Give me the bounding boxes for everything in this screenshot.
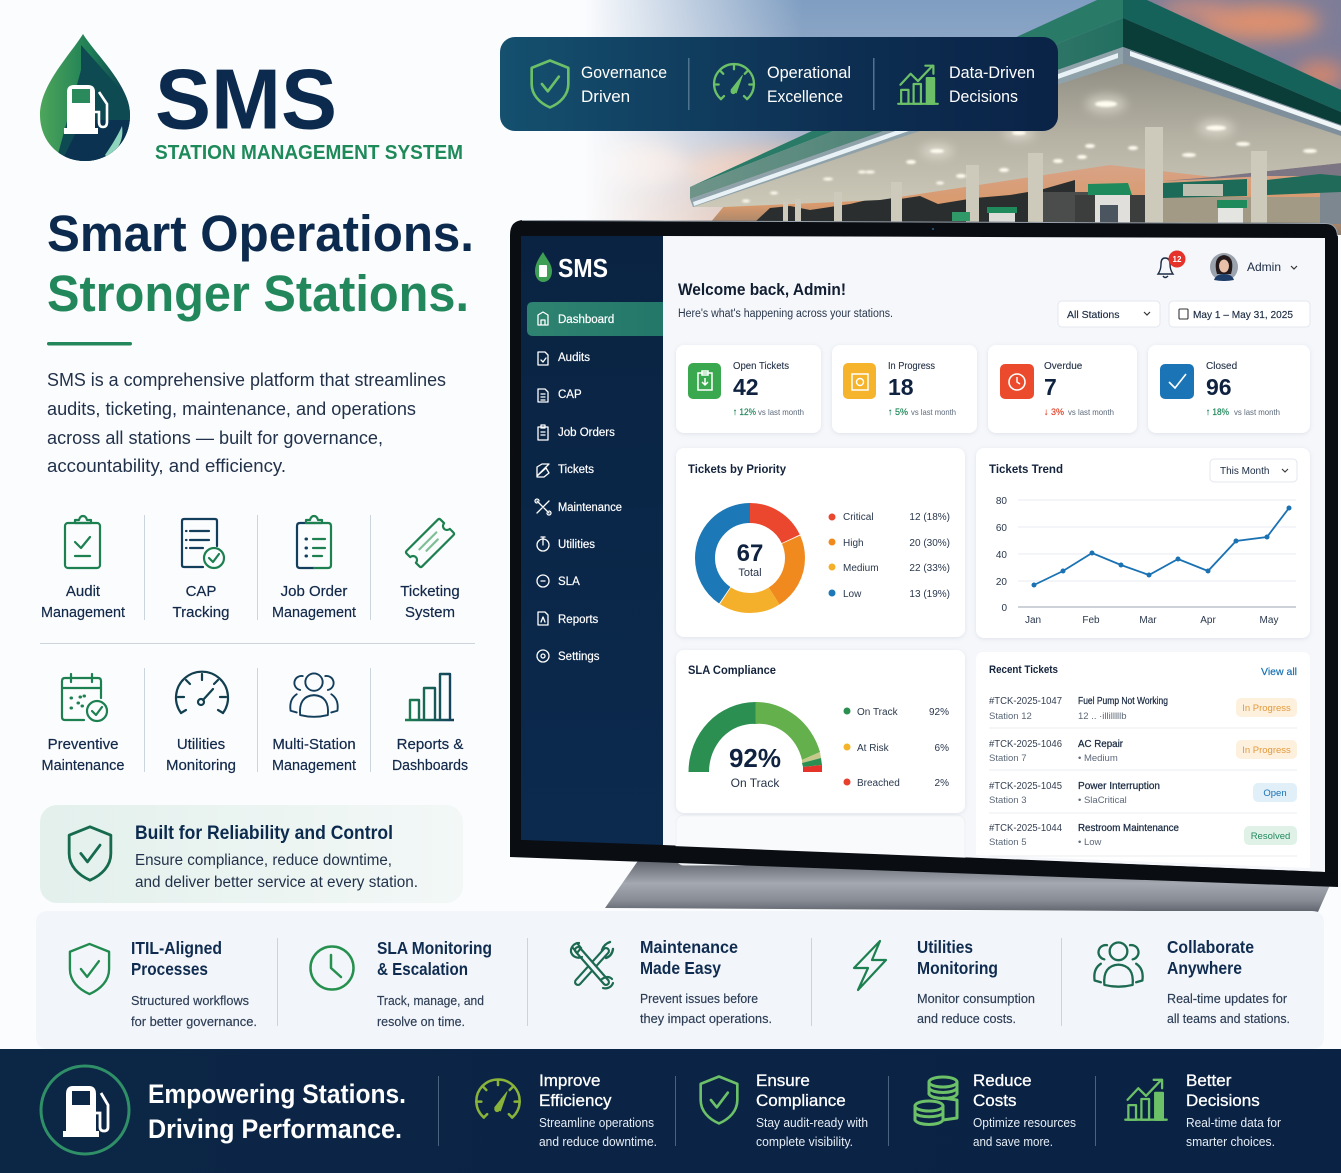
ticket row 1047: In Progress bbox=[1242, 703, 1291, 714]
user avatar: Admin bbox=[1247, 260, 1281, 274]
text: data-driven decisions: Decisions bbox=[949, 87, 1018, 106]
card: recent tickets: View all bbox=[1261, 666, 1297, 678]
label: audit management: Management bbox=[41, 604, 126, 621]
priority legend: 12 (18%) bbox=[909, 512, 950, 523]
KPI: overdue: 7 bbox=[1044, 374, 1057, 400]
dropdown: this month bbox=[1210, 459, 1297, 482]
SLA legend: 6% bbox=[935, 743, 949, 754]
KPI: in progress: In Progress bbox=[888, 361, 935, 372]
footer: reduce costs: Costs bbox=[973, 1091, 1016, 1110]
donut chart: 67 bbox=[737, 540, 763, 567]
KPI: closed bbox=[1148, 345, 1310, 433]
priority legend: Low bbox=[843, 589, 862, 600]
feature: utilities monitoring: Monitoring bbox=[917, 958, 998, 978]
feature: SLA monitoring: resolve on time. bbox=[377, 1014, 465, 1029]
footer: improve efficiency: Improve bbox=[539, 1071, 600, 1090]
icon: growth chart bbox=[898, 66, 938, 104]
monitor stand bbox=[605, 855, 1330, 912]
icon: job order clipboard bbox=[297, 516, 331, 568]
KPI: overdue: Overdue bbox=[1044, 361, 1083, 372]
KPI: in progress: 18 bbox=[888, 374, 914, 400]
feature: utilities monitoring: and reduce costs. bbox=[917, 1011, 1016, 1026]
footer: ensure compliance: Compliance bbox=[756, 1091, 846, 1110]
module grid bbox=[40, 515, 475, 774]
label: job order management: Management bbox=[272, 604, 357, 621]
icon: callout shield bbox=[69, 827, 111, 880]
user avatar bbox=[1210, 253, 1297, 281]
ticket row 1047: #TCK-2025-1047 bbox=[989, 696, 1062, 707]
empty lower card bbox=[676, 815, 965, 865]
text: governance driven bbox=[581, 63, 667, 106]
ticket row 1047: 12 .. ·illilllllb bbox=[1078, 711, 1127, 722]
left roof bbox=[690, 0, 1123, 187]
feature: collaborate anywhere bbox=[1094, 937, 1290, 1026]
SLA legend: On Track bbox=[857, 707, 899, 718]
label: CAP tracking: CAP bbox=[186, 583, 216, 600]
ticket row 1046: • Medium bbox=[1078, 753, 1118, 764]
intro paragraph: accountability, and efficiency. bbox=[47, 455, 286, 476]
monitor bottom bezel bbox=[510, 838, 1338, 887]
ticket row 1045: Station 3 bbox=[989, 795, 1026, 806]
feature: maintenance made easy: they impact operations. bbox=[640, 1011, 772, 1026]
priority legend: Medium bbox=[843, 563, 879, 574]
feature: utilities monitoring bbox=[854, 937, 1035, 1026]
card: SLA compliance bbox=[676, 650, 965, 813]
intro paragraph: across all stations — built for governance, bbox=[47, 427, 383, 448]
gauge chart: 92% bbox=[729, 743, 781, 773]
ticket row 1047 bbox=[989, 696, 1297, 722]
KPI: in progress bbox=[832, 345, 977, 433]
icon: audit clipboard bbox=[65, 516, 100, 568]
icon: governance shield bbox=[532, 61, 568, 107]
icon: utilities gauge bbox=[176, 672, 228, 713]
sidebar bbox=[521, 236, 663, 845]
feature: SLA monitoring bbox=[310, 938, 492, 1029]
nav items bbox=[535, 312, 622, 663]
footer: ensure compliance: complete visibility. bbox=[756, 1135, 853, 1149]
priority legend bbox=[828, 512, 950, 600]
line chart: Jan bbox=[1025, 615, 1041, 626]
dropdown: this month: This Month bbox=[1220, 466, 1269, 477]
SLA legend: Breached bbox=[857, 778, 900, 789]
sidebar logo: SMS bbox=[558, 253, 608, 283]
KPI: overdue: ↓ 3% bbox=[1044, 407, 1065, 418]
banner: pillars bbox=[500, 37, 1058, 131]
filter: date range: May 1 – May 31, 2025 bbox=[1193, 309, 1293, 321]
intro paragraph bbox=[47, 369, 446, 476]
line chart: 0 bbox=[1001, 603, 1007, 614]
footer slogan: Driving Performance. bbox=[148, 1114, 402, 1144]
ticket row 1044: Restroom Maintenance bbox=[1078, 823, 1179, 834]
footer: reduce costs: and save more. bbox=[973, 1135, 1053, 1149]
ticket row 1045: #TCK-2025-1045 bbox=[989, 781, 1062, 792]
footer pump icon bbox=[41, 1066, 129, 1154]
footer: improve efficiency: Efficiency bbox=[539, 1091, 612, 1110]
KPI: open tickets: 42 bbox=[733, 374, 759, 400]
label: preventive maintenance bbox=[42, 736, 124, 774]
ticket row 1046: Station 7 bbox=[989, 753, 1026, 764]
label: utilities monitoring bbox=[166, 736, 236, 774]
label: audit management bbox=[41, 583, 126, 621]
footer: ensure compliance: Ensure bbox=[756, 1071, 810, 1090]
label: reports and dashboards: Reports & bbox=[397, 736, 463, 753]
KPI: open tickets: ↑ 12% bbox=[733, 407, 756, 418]
label: multi-station management bbox=[272, 736, 357, 774]
ticket row 1046: In Progress bbox=[1242, 745, 1291, 756]
line chart: 80 bbox=[996, 496, 1007, 507]
SLA legend bbox=[844, 707, 949, 789]
card: tickets by priority: Tickets by Priority bbox=[688, 462, 786, 476]
gauge chart: On Track bbox=[731, 776, 780, 790]
label: ticketing system: System bbox=[405, 604, 455, 621]
label: preventive maintenance: Maintenance bbox=[42, 757, 124, 774]
priority legend: 20 (30%) bbox=[909, 538, 950, 549]
callout text bbox=[135, 852, 418, 891]
welcome subtext: Here's what's happening across your stations. bbox=[678, 308, 893, 320]
ticket row 1044: Resolved bbox=[1251, 831, 1290, 842]
ticket row 1046: #TCK-2025-1046 bbox=[989, 739, 1062, 750]
priority legend: Critical bbox=[843, 512, 874, 523]
feature: SLA monitoring: & Escalation bbox=[377, 959, 468, 979]
line chart: Mar bbox=[1139, 615, 1157, 626]
ticket row 1047: Fuel Pump Not Working bbox=[1078, 696, 1168, 707]
icon: ticket bbox=[405, 518, 455, 568]
footer: ensure compliance: Stay audit-ready with bbox=[756, 1116, 868, 1130]
laptop monitor with dashboard bbox=[510, 220, 1338, 887]
ticket row 1047: Station 12 bbox=[989, 711, 1032, 722]
label: job order management: Job Order bbox=[281, 583, 347, 600]
feature: SLA monitoring: SLA Monitoring bbox=[377, 938, 492, 958]
label: CAP tracking: Tracking bbox=[173, 604, 229, 621]
text: governance driven: Driven bbox=[581, 87, 630, 106]
priority legend: 22 (33%) bbox=[909, 563, 950, 574]
nav items: Utilities bbox=[558, 539, 595, 551]
icon: gauge bbox=[714, 64, 754, 99]
KPI: closed: ↑ 18% bbox=[1206, 407, 1229, 418]
feature: ITIL-aligned processes: Processes bbox=[131, 959, 208, 979]
KPI: in progress: ↑ 5% bbox=[888, 407, 909, 418]
features strip bbox=[36, 911, 1324, 1049]
ticket row 1044: #TCK-2025-1044 bbox=[989, 823, 1062, 834]
feature: maintenance made easy: Maintenance bbox=[640, 937, 738, 957]
nav items: Audits bbox=[558, 352, 590, 364]
callout: reliability and control bbox=[40, 805, 463, 903]
feature: collaborate anywhere: all teams and stations. bbox=[1167, 1011, 1290, 1026]
card: tickets trend: Tickets Trend bbox=[989, 462, 1063, 476]
label: utilities monitoring: Monitoring bbox=[166, 757, 236, 774]
footer: better decisions: Better bbox=[1186, 1071, 1232, 1090]
footer: better decisions: Real-time data for bbox=[1186, 1116, 1281, 1130]
sidebar logo bbox=[535, 252, 608, 283]
label: reports and dashboards: Dashboards bbox=[392, 757, 468, 774]
fuel pumps bbox=[952, 183, 1247, 223]
footer: reduce costs: Optimize resources bbox=[973, 1116, 1076, 1130]
KPI: in progress: vs last month bbox=[911, 407, 956, 417]
feature: utilities monitoring: Utilities bbox=[917, 937, 973, 957]
nav items: CAP bbox=[558, 389, 582, 401]
text: operational excellence: Excellence bbox=[767, 87, 843, 106]
line chart: Feb bbox=[1082, 615, 1100, 626]
feature: collaborate anywhere: Anywhere bbox=[1167, 958, 1242, 978]
ticket row 1045: Power Interruption bbox=[1078, 781, 1160, 792]
footer: reduce costs: Reduce bbox=[973, 1071, 1032, 1090]
feature: SLA monitoring: Track, manage, and bbox=[377, 993, 484, 1008]
KPI: open tickets: Open Tickets bbox=[733, 361, 789, 372]
feature: maintenance made easy: Prevent issues before bbox=[640, 991, 758, 1006]
text: operational excellence bbox=[767, 63, 851, 106]
logo subtitle: STATION MANAGEMENT SYSTEM bbox=[155, 142, 463, 164]
intro paragraph: audits, ticketing, maintenance, and operations bbox=[47, 398, 416, 419]
icon: preventive maintenance calendar bbox=[62, 674, 107, 721]
nav items: SLA bbox=[558, 576, 580, 588]
footer: better decisions bbox=[1125, 1071, 1281, 1149]
label: preventive maintenance: Preventive bbox=[48, 736, 118, 753]
label: job order management bbox=[272, 583, 357, 621]
text: data-driven decisions bbox=[949, 63, 1035, 106]
gauge chart bbox=[688, 702, 822, 790]
footer: improve efficiency bbox=[476, 1071, 657, 1149]
right roof bbox=[1123, 0, 1341, 112]
nav items: Tickets bbox=[558, 464, 594, 476]
footer slogan bbox=[148, 1079, 406, 1144]
photo: fuel station at sunset bbox=[500, 0, 1341, 235]
feature: collaborate anywhere: Collaborate bbox=[1167, 937, 1254, 957]
label: multi-station management: Multi-Station bbox=[272, 736, 356, 753]
logo wordmark: SMS: SMS bbox=[155, 52, 337, 148]
nav items: Settings bbox=[558, 651, 600, 663]
line chart: 40 bbox=[996, 550, 1007, 561]
label: ticketing system bbox=[400, 583, 460, 621]
SLA legend: 2% bbox=[935, 778, 949, 789]
card: recent tickets bbox=[976, 652, 1310, 868]
icon: multi-station people bbox=[290, 673, 338, 717]
ticket row 1044 bbox=[989, 823, 1297, 848]
ticket row 1044: • Low bbox=[1078, 837, 1102, 848]
screen background bbox=[663, 236, 1325, 872]
filter: all stations: All Stations bbox=[1067, 309, 1120, 321]
notification bell bbox=[1158, 250, 1186, 278]
nav: dashboard active bbox=[527, 302, 663, 336]
card: recent tickets: Recent Tickets bbox=[989, 664, 1058, 676]
ceiling lights bbox=[921, 95, 1234, 158]
KPI: closed: Closed bbox=[1206, 361, 1237, 372]
card: SLA compliance: SLA Compliance bbox=[688, 663, 776, 677]
intro paragraph: SMS is a comprehensive platform that streamlines bbox=[47, 369, 446, 390]
headline: Stronger Stations. bbox=[47, 265, 469, 322]
feature: ITIL-aligned processes: for better governance. bbox=[131, 1014, 257, 1029]
feature: maintenance made easy bbox=[571, 937, 772, 1026]
line chart: May bbox=[1260, 615, 1278, 626]
logo: fuel drop bbox=[40, 34, 130, 165]
nav items: Maintenance bbox=[558, 502, 622, 514]
icon: reports bars bbox=[405, 674, 454, 720]
footer: better decisions: smarter choices. bbox=[1186, 1135, 1275, 1149]
ticket row 1044: Station 5 bbox=[989, 837, 1026, 848]
callout text: and deliver better service at every station. bbox=[135, 874, 418, 891]
nav items: Reports bbox=[558, 614, 599, 626]
filter: date range bbox=[1169, 301, 1310, 327]
ticket row 1046 bbox=[989, 739, 1297, 764]
sunset horizon bbox=[700, 160, 1341, 235]
text: governance driven: Governance bbox=[581, 63, 667, 82]
footer band bbox=[0, 1049, 1341, 1173]
card: tickets trend bbox=[976, 448, 1310, 638]
footer: improve efficiency: and reduce downtime. bbox=[539, 1135, 657, 1149]
columns bbox=[783, 127, 1267, 223]
KPI: closed: 96 bbox=[1206, 374, 1232, 400]
notification bell: 12 bbox=[1173, 255, 1182, 264]
feature: utilities monitoring: Monitor consumption bbox=[917, 991, 1035, 1006]
feature: ITIL-aligned processes bbox=[70, 938, 257, 1029]
card: tickets by priority bbox=[676, 448, 965, 637]
priority legend: High bbox=[843, 538, 864, 549]
KPI: closed: vs last month bbox=[1234, 407, 1280, 417]
text: data-driven decisions: Data-Driven bbox=[949, 63, 1035, 82]
label: reports and dashboards bbox=[392, 736, 468, 774]
ticket row 1046: AC Repair bbox=[1078, 739, 1124, 750]
SLA legend: 92% bbox=[929, 707, 949, 718]
headline bbox=[47, 205, 474, 322]
footer slogan: Empowering Stations. bbox=[148, 1079, 406, 1109]
callout text: Ensure compliance, reduce downtime, bbox=[135, 852, 392, 869]
footer: better decisions: Decisions bbox=[1186, 1091, 1260, 1110]
KPI: open tickets bbox=[676, 345, 821, 433]
filter: all stations bbox=[1058, 301, 1160, 327]
label: utilities monitoring: Utilities bbox=[177, 736, 225, 753]
text: operational excellence: Operational bbox=[767, 63, 851, 82]
headline: Smart Operations. bbox=[47, 205, 474, 262]
label: multi-station management: Management bbox=[272, 757, 357, 774]
KPI: overdue bbox=[988, 345, 1137, 433]
ceiling bbox=[693, 63, 1341, 207]
welcome heading: Welcome back, Admin! bbox=[678, 280, 846, 299]
footer: ensure compliance bbox=[701, 1071, 868, 1149]
line chart bbox=[996, 496, 1296, 626]
feature: ITIL-aligned processes: ITIL-Aligned bbox=[131, 938, 222, 958]
donut chart: Total bbox=[738, 567, 762, 579]
footer: reduce costs bbox=[915, 1071, 1076, 1149]
line chart: 20 bbox=[996, 577, 1007, 588]
callout title: Built for Reliability and Control bbox=[135, 823, 393, 844]
ticket row 1045: • SlaCritical bbox=[1078, 795, 1127, 806]
footer: improve efficiency: Streamline operations bbox=[539, 1116, 654, 1130]
SLA legend: At Risk bbox=[857, 743, 890, 754]
donut chart bbox=[705, 513, 795, 603]
KPI: open tickets: vs last month bbox=[758, 407, 804, 417]
feature: maintenance made easy: Made Easy bbox=[640, 958, 721, 978]
icon: CAP tracking bbox=[182, 519, 224, 568]
label: audit management: Audit bbox=[66, 583, 101, 600]
KPI: overdue: vs last month bbox=[1068, 407, 1114, 417]
feature: collaborate anywhere: Real-time updates for bbox=[1167, 991, 1288, 1006]
feature: ITIL-aligned processes: Structured workflows bbox=[131, 993, 249, 1008]
nav items: Dashboard bbox=[558, 314, 614, 326]
label: CAP tracking bbox=[173, 583, 229, 621]
ticket row 1045: Open bbox=[1263, 788, 1287, 799]
priority legend: 13 (19%) bbox=[909, 589, 950, 600]
nav items: Job Orders bbox=[558, 427, 615, 439]
line chart: Apr bbox=[1200, 615, 1216, 626]
label: ticketing system: Ticketing bbox=[400, 583, 460, 600]
ticket row 1045 bbox=[989, 781, 1297, 806]
line chart: 60 bbox=[996, 523, 1007, 534]
